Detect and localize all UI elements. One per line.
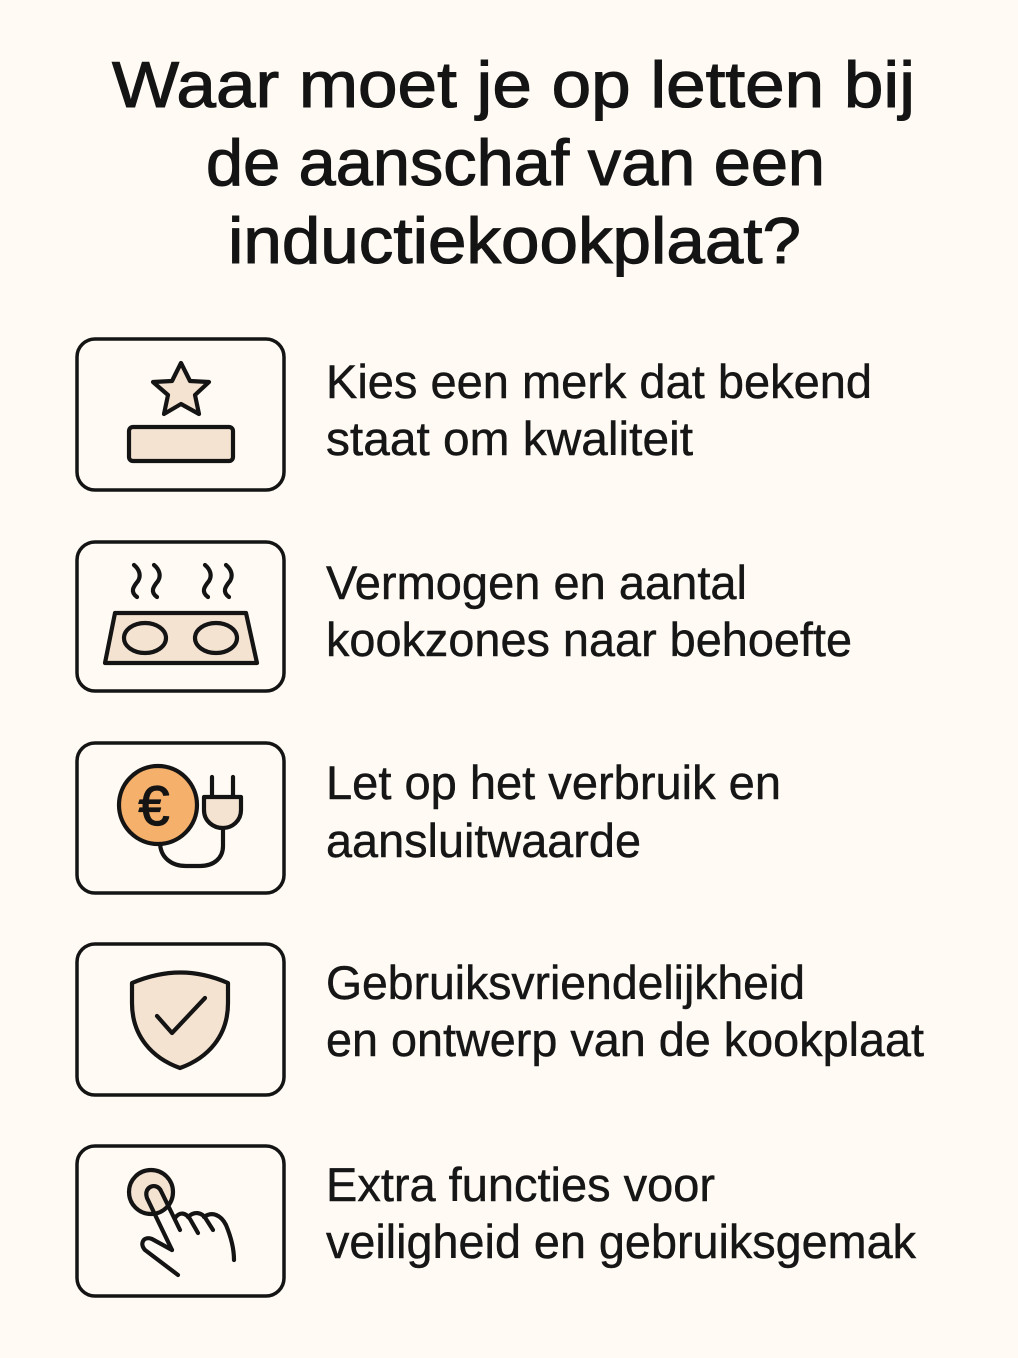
text: verbruik: [326, 756, 781, 867]
text: gebruik: en ontwerp van de kookplaat: [326, 1013, 924, 1066]
icon: hand pressing button: [129, 1170, 234, 1275]
text: verbruik: aansluitwaarde: [326, 814, 641, 867]
text: merk: staat om kwaliteit: [326, 412, 693, 465]
text: functies: Extra functies voor: [326, 1158, 715, 1211]
text: gebruik: [326, 956, 924, 1066]
icon: euro coin and plug: €: [138, 774, 170, 837]
text: vermogen: Vermogen en aantal: [326, 556, 747, 609]
title: inductiekookplaat?: [228, 204, 801, 277]
text: gebruik: Gebruiksvriendelijkheid: [326, 956, 805, 1009]
icon: star on plate: [129, 363, 233, 461]
panel: gebruik: [77, 944, 284, 1095]
icon: hob with steam: [105, 565, 257, 663]
panel: verbruik: [77, 743, 284, 893]
text: functies: veiligheid en gebruiksgemak: [326, 1215, 916, 1268]
text: vermogen: kookzones naar behoefte: [326, 613, 852, 666]
panel: vermogen: [77, 542, 284, 691]
text: vermogen: [326, 556, 852, 666]
text: merk: [326, 355, 872, 465]
panel: merk: [77, 339, 284, 490]
title: de aanschaf van een: [206, 126, 825, 199]
panel: functies: [77, 1146, 284, 1296]
icon: shield with check: [132, 972, 228, 1068]
title: Waar moet je op letten bij: [112, 48, 915, 121]
text: functies: [326, 1158, 916, 1268]
text: verbruik: Let op het verbruik en: [326, 756, 781, 809]
title: [112, 48, 915, 277]
icon: euro coin and plug: [119, 766, 241, 866]
text: merk: Kies een merk dat bekend: [326, 355, 872, 408]
